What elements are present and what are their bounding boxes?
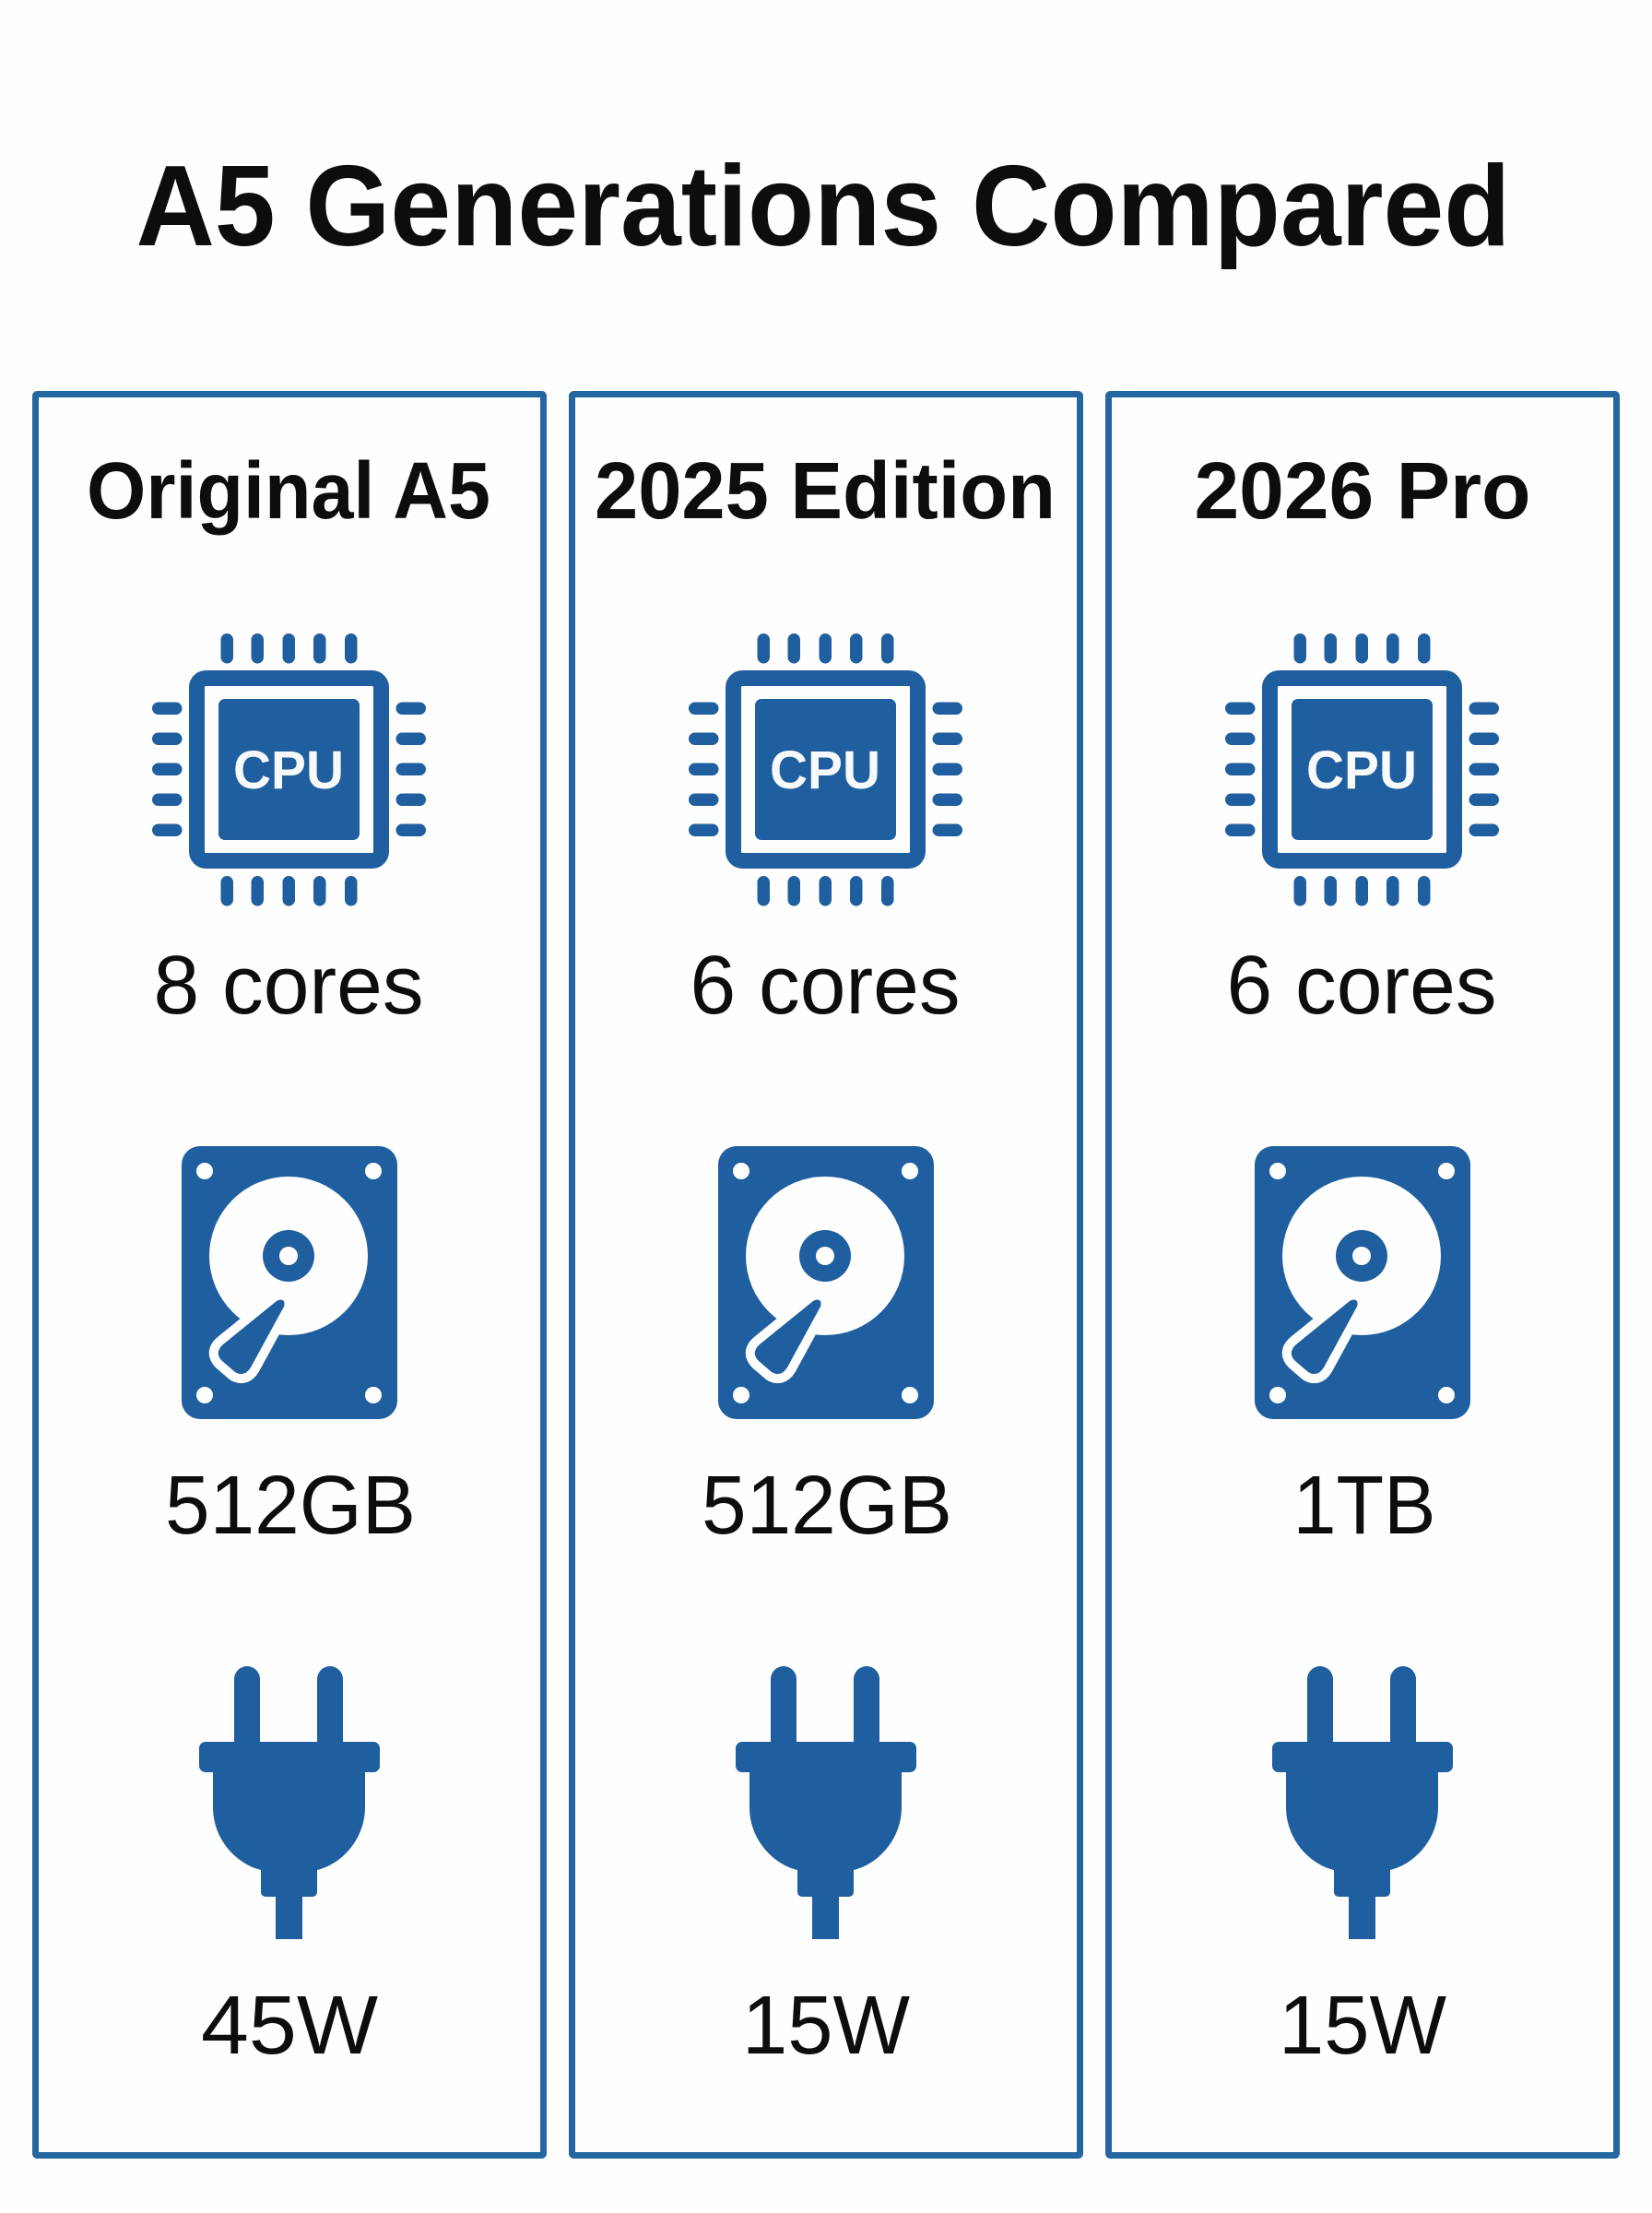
heading: 2025 Edition: 2025 Edition: [595, 446, 1056, 536]
storage value: 512GB: [165, 1460, 416, 1552]
icon: CPU chip: [1225, 633, 1499, 905]
icon: power plug: [199, 1666, 380, 1939]
power value: 15W: [742, 1980, 910, 2072]
power value: 45W: [201, 1980, 378, 2072]
icon: CPU chip: CPU: [233, 740, 344, 800]
panel border: [572, 395, 1080, 2156]
panel border: [35, 395, 544, 2156]
power value: 15W: [1279, 1980, 1446, 2072]
icon: power plug: [1272, 1666, 1453, 1939]
icon: power plug: [736, 1666, 916, 1939]
icon: hard drive: [718, 1146, 934, 1419]
panel border: [1108, 395, 1617, 2156]
icon: hard drive: [182, 1146, 397, 1419]
storage value: 512GB: [702, 1460, 952, 1552]
storage value: 1TB: [1292, 1460, 1436, 1552]
heading: 2026 Pro: 2026 Pro: [1195, 446, 1530, 536]
icon: CPU chip: CPU: [770, 740, 880, 800]
cores value: 8 cores: [153, 940, 424, 1032]
panel: 2025 Edition: [572, 395, 1080, 2156]
title: A5 Generations Compared: [136, 143, 1510, 270]
icon: CPU chip: CPU: [1306, 740, 1417, 800]
icon: CPU chip: [689, 633, 962, 905]
panel: 2026 Pro: [1108, 395, 1617, 2156]
heading: Original A5: Original A5: [87, 446, 490, 536]
icon: hard drive: [1255, 1146, 1470, 1419]
icon: CPU chip: [152, 633, 426, 905]
panel: Original A5: [35, 395, 544, 2156]
cores value: 6 cores: [690, 940, 961, 1032]
cores value: 6 cores: [1226, 940, 1497, 1032]
